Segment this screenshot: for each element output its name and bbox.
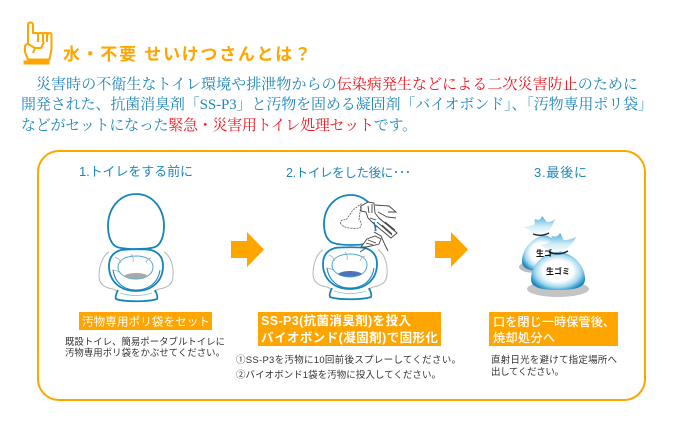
title: 水・不要 せいけつさんとは？ [63, 45, 311, 64]
icon: toilet with bag [99, 194, 173, 301]
step 1 description: 既設トイレ、簡易ポータブルトイレに [65, 336, 225, 347]
step 1 description [65, 336, 225, 358]
step 1 label [79, 312, 212, 330]
step 1 heading: 1.トイレをする前に [79, 164, 193, 179]
step 3 label: 口を閉じ一時保管後、 [493, 314, 615, 329]
bag labels: 生ゴ [536, 248, 552, 258]
hand with sachet [360, 222, 388, 252]
intro text block: 開発された、抗菌消臭剤「SS-P3」と汚物を固める凝固剤「バイオボンド」、「汚物専用ポリ袋」 [21, 95, 653, 113]
step 2 label: SS-P3(抗菌消臭剤)を投入 [261, 313, 411, 328]
step 3 label: 焼却処分へ [493, 330, 555, 345]
step 2 description: ①SS-P3を汚物に10回前後スプレーしてください。 [236, 354, 461, 366]
panel: steps [38, 151, 645, 400]
step 2 description [236, 354, 461, 381]
icon: garbage bags [519, 216, 589, 297]
step 2 label [258, 312, 441, 346]
icon: garbage bags: 生ゴミ [546, 266, 570, 276]
intro text block: などがセットになった緊急・災害用トイレ処理セットです。 [21, 116, 417, 134]
spray mist [340, 204, 361, 228]
step 3 heading: 3.最後に [534, 165, 587, 180]
step 2 label: バイオボンド(凝固剤)で固形化 [261, 330, 438, 345]
intro text block [21, 75, 653, 134]
icon: toilet with spray [313, 195, 397, 299]
icon: pointing hand [24, 22, 52, 64]
intro text block: 災害時の不衛生なトイレ環境や排泄物からの伝染病発生などによる二次災害防止のために [36, 75, 638, 93]
step 3 description: 直射日光を避けて指定場所へ [491, 354, 617, 366]
arrow 1 [231, 232, 264, 267]
step 3 label [489, 312, 618, 346]
step 3 description [491, 354, 617, 378]
step 2 heading: 2.トイレをした後に･･･ [286, 166, 411, 180]
step 2 description: ②バイオボンド1袋を汚物に投入してください。 [236, 369, 441, 381]
arrow 2 [435, 232, 468, 267]
step 1 label: 汚物専用ポリ袋をセット [82, 314, 210, 328]
step 1 description: 汚物専用ポリ袋をかぶせてください。 [65, 347, 225, 358]
back bag [522, 235, 562, 271]
step 3 description: 出してください。 [491, 366, 564, 378]
hand and spray bottle [361, 202, 397, 238]
front bag [531, 252, 585, 290]
